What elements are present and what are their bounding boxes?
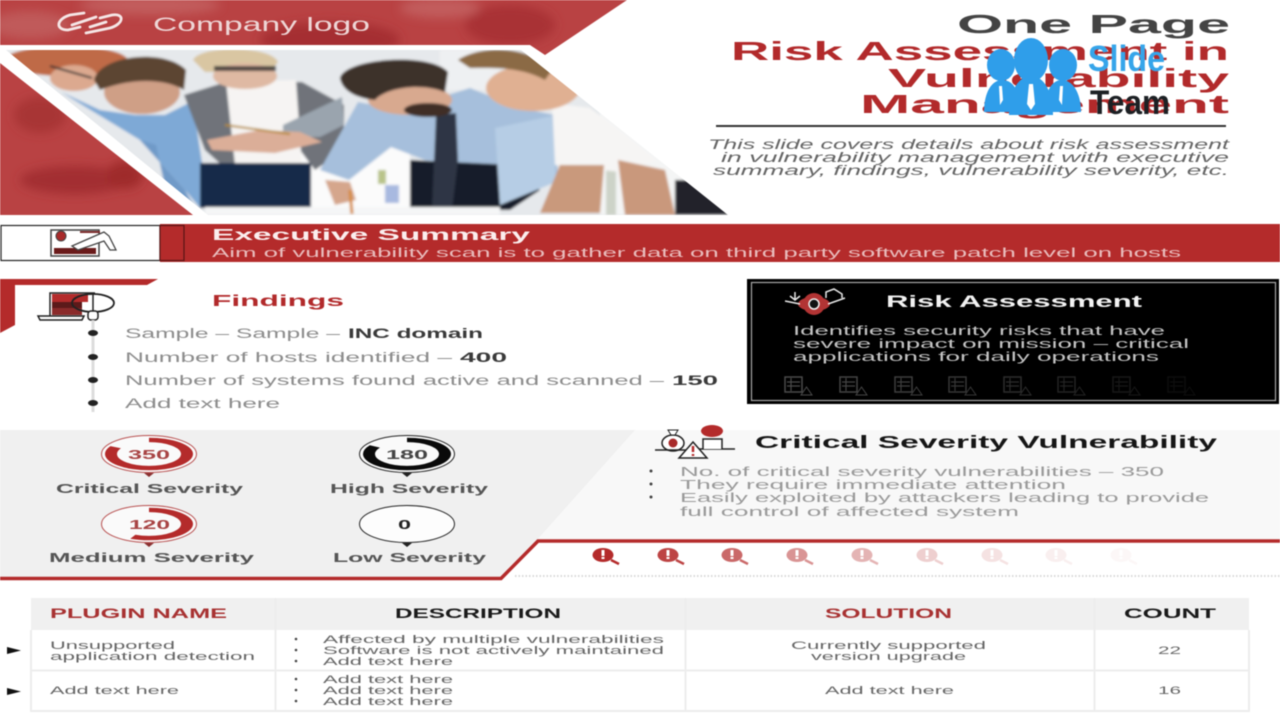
executive summary heading: Executive Summary <box>212 227 531 244</box>
panel: severity background <box>0 430 1280 578</box>
title: Management <box>860 89 1230 119</box>
critical severity heading: Critical Severity Vulnerability <box>755 432 1218 452</box>
critical severity bullets: Easily exploited by attackers leading to provide <box>680 490 1209 505</box>
SlideTeam watermark: Team <box>1090 84 1170 122</box>
panel: risk assessment <box>747 279 1279 404</box>
table row 1: Software is not actively maintained <box>323 645 664 657</box>
subtitle: in vulnerability management with executive <box>721 150 1229 165</box>
table row 1: version upgrade <box>811 651 966 663</box>
dotted line <box>515 575 1280 577</box>
icon: money bag, hacker and warning <box>655 425 735 458</box>
findings list <box>125 326 718 411</box>
subtitle: This slide covers details about risk assessment <box>708 137 1231 152</box>
SlideTeam watermark: Slide <box>1088 38 1165 79</box>
gauge: critical severity: 350 <box>128 447 170 462</box>
gauge: low severity: 0 <box>398 517 411 532</box>
icon: company logo link <box>59 13 121 33</box>
company logo text: Company logo <box>153 14 370 36</box>
findings list: 400 <box>460 350 507 365</box>
findings list: Sample – Sample – <box>125 326 341 341</box>
title: Vulnerability <box>888 63 1230 93</box>
critical severity bullets: full control of affected system <box>680 504 1019 519</box>
findings heading: Findings <box>212 293 344 310</box>
gauge: critical severity <box>56 436 244 496</box>
table header <box>31 598 1249 630</box>
table header: DESCRIPTION <box>395 606 561 621</box>
critical severity bullets <box>650 464 1209 519</box>
title rule <box>716 125 1226 127</box>
risk assessment text <box>793 323 1189 364</box>
red divider <box>0 541 1280 578</box>
table header: SOLUTION <box>825 606 952 621</box>
findings list: Number of systems found active and scanned – <box>125 373 665 388</box>
gauge: medium severity: Medium Severity <box>49 550 256 565</box>
findings timeline <box>88 320 98 412</box>
person: red-haired woman <box>4 46 128 91</box>
team photo <box>0 45 740 220</box>
icon: findings scroll and magnifier <box>38 293 114 320</box>
findings list: Add text here <box>125 396 280 411</box>
row arrows <box>7 647 21 695</box>
gauge: medium severity <box>49 506 256 565</box>
table row 2: Add text here <box>323 696 453 708</box>
risk assessment heading: Risk Assessment <box>886 293 1143 311</box>
panel: critical severity vulnerability <box>592 425 1218 564</box>
table row 2: 16 <box>1158 685 1181 697</box>
findings list: INC domain <box>348 326 483 341</box>
title <box>731 9 1230 119</box>
desk <box>205 207 500 215</box>
company logo banner <box>0 0 627 58</box>
gauge: low severity: Low Severity <box>333 550 487 565</box>
gauge: high severity: High Severity <box>330 481 489 496</box>
title: Risk Assessment in <box>731 36 1229 66</box>
person: man in white shirt <box>458 50 730 215</box>
subtitle <box>708 137 1231 178</box>
person: blonde woman with tablet <box>184 49 344 208</box>
risk assessment text: severe impact on mission – critical <box>793 336 1189 351</box>
table row 2 <box>50 674 1181 708</box>
title: One Page <box>957 9 1230 39</box>
SlideTeam watermark <box>984 38 1170 122</box>
table row 2: Add text here <box>323 685 453 697</box>
table row 2: Add text here <box>825 685 954 697</box>
red triangle panel <box>0 63 193 215</box>
risk assessment text: Identifies security risks that have <box>793 323 1165 338</box>
fading magnifier alert icons <box>592 548 1137 564</box>
table row 2: Add text here <box>323 674 453 686</box>
gauge: high severity <box>330 436 489 496</box>
icon: risk gear <box>785 289 845 315</box>
gauge: critical severity: Critical Severity <box>56 481 244 496</box>
fading document icons <box>785 377 1195 395</box>
table header: PLUGIN NAME <box>50 606 227 621</box>
icon: report with pen <box>51 230 116 256</box>
critical severity bullets: No. of critical severity vulnerabilities – 350 <box>680 464 1164 479</box>
table header: COUNT <box>1124 606 1217 621</box>
person: man in blue shirt <box>61 57 207 210</box>
findings list: Number of hosts identified – <box>125 350 453 365</box>
gauge: medium severity: 120 <box>129 517 170 532</box>
table row 1: Affected by multiple vulnerabilities <box>323 634 665 646</box>
table row 1: Currently supported <box>791 640 986 652</box>
executive summary bar <box>1 224 1280 262</box>
table row 1: application detection <box>50 651 255 663</box>
table row 2: Add text here <box>50 685 179 697</box>
critical severity bullets: They require immediate attention <box>680 477 1066 492</box>
table row 1: Unsupported <box>50 640 175 652</box>
table row 1: Add text here <box>323 656 453 668</box>
risk assessment text: applications for daily operations <box>793 349 1160 364</box>
table grid <box>31 598 1249 711</box>
executive summary text: Aim of vulnerability scan is to gather data on third party software patch level on hosts <box>212 246 1181 260</box>
gauge: high severity: 180 <box>386 447 428 462</box>
table <box>7 598 1249 711</box>
findings list: 150 <box>672 373 718 388</box>
table row 1: 22 <box>1158 645 1181 657</box>
table row 1 <box>50 634 1181 668</box>
panel: findings <box>0 279 718 412</box>
gauge: low severity <box>333 506 487 565</box>
subtitle: summary, findings, vulnerability severity, etc. <box>713 163 1229 178</box>
person: bearded man with tie <box>320 60 558 210</box>
